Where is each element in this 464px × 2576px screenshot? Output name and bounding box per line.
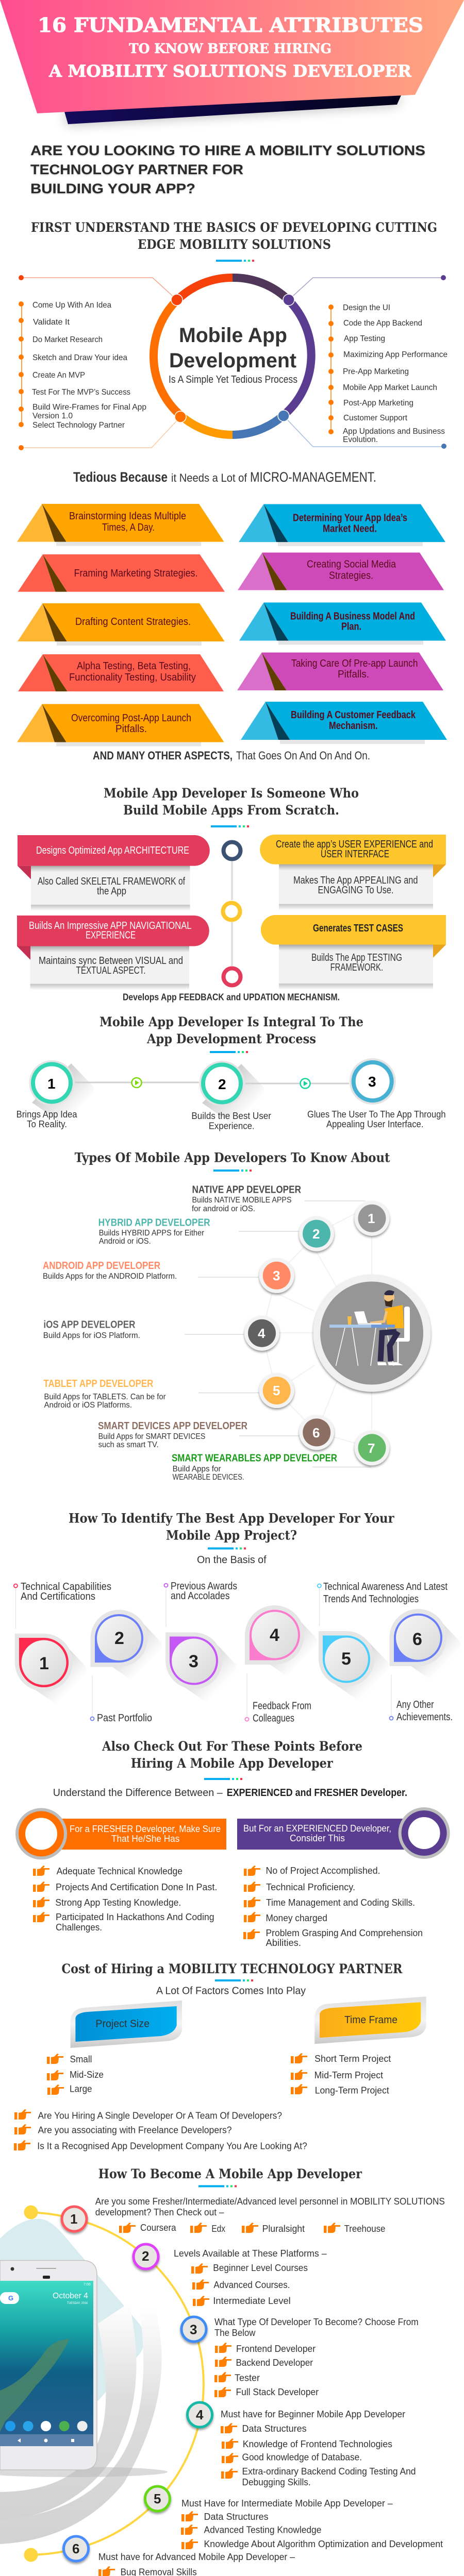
pin 6: [389, 1609, 446, 1666]
list: other factors: Is It a Recognised App Development Company You Are Looking At?: [37, 2141, 307, 2151]
step 1 text: Are you some Fresher/Intermediate/Advanced level personnel in MOBILITY SOLUTIONS: [95, 2196, 445, 2207]
banner: experienced: [237, 1807, 450, 1859]
list: experienced requirements: No of Project Accomplished.: [266, 1866, 380, 1876]
label: hybrid: Android or iOS.: [99, 1237, 151, 1246]
step 1: 1: [47, 1076, 56, 1092]
card: testing: Alpha Testing, Beta Testing,: [77, 660, 191, 672]
card: business model: Building A Business Model And: [290, 611, 415, 622]
pin labels: Any Other: [396, 1699, 434, 1710]
list: fresher requirements: Challenges.: [56, 1922, 102, 1933]
card: marketing strategies: [18, 554, 225, 592]
step 1 text: Edx: [211, 2224, 225, 2234]
banner: experienced: But For an EXPERIENCED Developer,: [243, 1823, 391, 1834]
button: project size: [71, 2001, 182, 2048]
card: social media: Creating Social Media: [307, 558, 396, 570]
label: tablet: TABLET APP DEVELOPER: [43, 1378, 154, 1389]
path node 3: [181, 2317, 206, 2342]
illustration: phone: G: [8, 2294, 13, 2302]
heading: become: How To Become A Mobile App Developer: [98, 2166, 362, 2181]
panel: test cases: FRAMEWORK.: [330, 962, 383, 973]
label: smart devices: such as smart TV.: [98, 1440, 159, 1449]
intro question: [30, 143, 425, 196]
list: other factors: [14, 2109, 307, 2151]
card: pre-launch pitfalls: Taking Care Of Pre-app Launch: [291, 658, 418, 669]
step labels: [16, 1109, 446, 1131]
button: time frame: [314, 1996, 426, 2044]
heading: check points: Hiring A Mobile App Developer: [131, 1756, 333, 1771]
list: build steps: App Updations and Business: [343, 427, 445, 436]
label: hybrid: Builds HYBRID APPS for Either: [99, 1229, 205, 1238]
intro question: TECHNOLOGY PARTNER FOR: [30, 162, 243, 177]
diagram: developer types: [43, 1184, 431, 1482]
criteria pins: [14, 1581, 460, 1724]
step 3 text: Tester: [235, 2373, 260, 2383]
step 2 text: Advanced Courses.: [213, 2280, 290, 2290]
card: market need: Determining Your App Idea’s: [293, 512, 407, 523]
step 3 text: [214, 2317, 419, 2397]
step 5 text: Data Structures: [204, 2512, 269, 2522]
node 6: 6: [312, 1425, 320, 1440]
path node 5: 5: [154, 2491, 161, 2506]
panel: navigation: Maintains sync Between VISUAL and: [39, 955, 183, 967]
list: fresher requirements: Projects And Certification Done In Past.: [56, 1882, 217, 1892]
list: build steps: Post-App Marketing: [343, 399, 413, 408]
card: testing: Functionality Testing, Usability: [69, 672, 196, 683]
pin labels: Achievements.: [396, 1711, 453, 1723]
button: project size: Project Size: [95, 2019, 150, 2030]
step 4 text: [221, 2409, 416, 2487]
path node 3: 3: [190, 2322, 197, 2337]
step labels: Builds the Best User: [191, 1111, 271, 1121]
ring title: [169, 324, 297, 385]
path node 1: 1: [70, 2211, 77, 2227]
illustration: phone: October 4: [53, 2292, 88, 2300]
path node 1: [62, 2207, 87, 2231]
process chain: [16, 1058, 446, 1131]
pin 4: [245, 1605, 304, 1665]
heading: types: [75, 1150, 390, 1172]
panel: user experience: ENGAGING To Use.: [318, 885, 394, 896]
list: experienced requirements: Technical Proficiency.: [266, 1882, 355, 1892]
list: build steps: [328, 303, 448, 444]
pin labels: Technical Capabilities: [21, 1581, 111, 1592]
pin labels: Colleagues: [253, 1713, 294, 1724]
ring title: Development: [169, 349, 296, 372]
timeline: [223, 842, 240, 985]
step 2: 2: [218, 1076, 226, 1092]
panel: architecture: Also Called SKELETAL FRAMEWORK of: [38, 876, 185, 887]
panel: test cases: Builds The App TESTING: [311, 952, 402, 963]
heading: basics: EDGE MOBILITY SOLUTIONS: [138, 237, 331, 252]
list: fresher requirements: Participated In Hackathons And Coding: [56, 1912, 214, 1922]
chart: app development ring: [19, 275, 446, 450]
step 2 text: [174, 2248, 327, 2306]
list: fresher requirements: Adequate Technical Knowledge: [57, 1866, 183, 1876]
label: smart devices: SMART DEVICES APP DEVELOPER: [98, 1420, 247, 1432]
heading: types: Types Of Mobile App Developers To Know About: [75, 1150, 390, 1165]
node 4: 4: [258, 1326, 266, 1341]
banner ribbon: [0, 0, 464, 113]
step 4 text: Data Structures: [242, 2424, 307, 2434]
list: build steps: Maximizing App Performance: [343, 350, 448, 359]
label: tablet: Android or iOS Platforms.: [44, 1401, 132, 1410]
label: ios: Build Apps for iOS Platform.: [43, 1331, 140, 1340]
card: brainstorming: Brainstorming Ideas Multiple: [69, 511, 186, 522]
list: experienced requirements: Money charged: [266, 1913, 327, 1923]
node 5: 5: [273, 1383, 280, 1398]
pin labels: Feedback From: [253, 1700, 311, 1711]
banner: experienced: Consider This: [290, 1833, 345, 1843]
list: time frames: Short Term Project: [314, 2054, 391, 2064]
step 5 text: [181, 2498, 443, 2549]
pin labels: And Certifications: [21, 1591, 95, 1602]
panel: user experience: [260, 835, 446, 910]
node 4: [244, 1316, 279, 1351]
heading: identify: [69, 1511, 394, 1566]
list: project sizes: [47, 2054, 104, 2095]
panel: test cases: [261, 915, 446, 990]
heading: check points: EXPERIENCED and FRESHER Developer.: [227, 1787, 407, 1799]
label: native: Builds NATIVE MOBILE APPS: [192, 1196, 292, 1205]
list: build steps: App Testing: [344, 334, 385, 343]
heading: integral: App Development Process: [146, 1031, 316, 1046]
heading: integral: Mobile App Developer Is Integral To The: [100, 1014, 363, 1029]
chart: learning path: [24, 2205, 212, 2562]
path node 6: 6: [72, 2541, 79, 2556]
card: feedback mechanism: Mechanism.: [329, 720, 377, 732]
heading: developer definition: [104, 786, 359, 827]
step 4 text: Good knowledge of Database.: [242, 2452, 362, 2463]
step 4 text: Extra-ordinary Backend Coding Testing And: [242, 2466, 416, 2477]
node 7: [355, 1430, 390, 1465]
step 4 text: Must have for Beginner Mobile App Developer: [221, 2409, 405, 2419]
panel: architecture: [18, 835, 210, 911]
label: android: [43, 1260, 177, 1281]
step 5 text: Advanced Testing Knowledge: [204, 2524, 321, 2535]
card: content strategies: [18, 603, 225, 646]
panel: navigation: [17, 916, 209, 990]
heading: cost: A Lot Of Factors Comes Into Play: [156, 1986, 306, 1997]
card: business model: Plan.: [341, 621, 361, 633]
heading: check points: Also Check Out For These Points Before: [102, 1739, 362, 1754]
list: idea steps: [19, 301, 146, 430]
node 2: 2: [312, 1226, 320, 1242]
list: experienced requirements: Abilities.: [266, 1938, 301, 1948]
banner: fresher: That He/She Has: [111, 1834, 179, 1844]
node 6: [299, 1415, 334, 1450]
pin 3: 3: [189, 1652, 198, 1671]
card: pre-launch pitfalls: Pitfalls.: [338, 669, 369, 680]
list: build steps: Evolution.: [343, 435, 378, 444]
path node 2: [134, 2244, 158, 2269]
step 6 text: [97, 2552, 312, 2576]
illustration: developer at desk: [313, 1275, 431, 1392]
list: idea steps: Select Technology Partner: [32, 421, 125, 430]
list: experienced requirements: Problem Grasping And Comprehension: [266, 1928, 423, 1938]
list: build steps: Design the UI: [343, 303, 390, 312]
pin labels: Previous Awards: [171, 1581, 237, 1592]
list: idea steps: Test For The MVP’s Success: [32, 388, 130, 397]
text: feedback mechanism: Develops App FEEDBACK and UPDATION MECHANISM.: [123, 992, 340, 1003]
panel: architecture: the App: [97, 886, 126, 897]
step 2 text: Beginner Level Courses: [213, 2263, 308, 2273]
card: brainstorming: Times, A Day.: [102, 522, 155, 533]
label: wearables: Build Apps for: [173, 1465, 221, 1473]
text: many other aspects: That Goes On And On And On.: [236, 749, 370, 762]
pin 3: [165, 1632, 222, 1689]
label: tablet: [43, 1378, 166, 1410]
pin labels: Past Portfolio: [97, 1713, 152, 1724]
card: brainstorming: [17, 504, 224, 546]
label: smart devices: Build Apps for SMART DEVICES: [98, 1432, 205, 1441]
pin 1: 1: [39, 1654, 49, 1673]
ring title: Is A Simple Yet Tedious Process: [169, 374, 297, 385]
node 3: 3: [273, 1268, 280, 1283]
label: wearables: SMART WEARABLES APP DEVELOPER: [172, 1452, 337, 1464]
label: native: [192, 1184, 301, 1213]
panel: architecture: Designs Optimized App ARCHITECTURE: [36, 845, 189, 856]
heading: check points: Understand the Difference Between –: [53, 1787, 223, 1799]
pin labels: [21, 1581, 453, 1724]
card: social media: [238, 552, 444, 590]
pin labels: Trends And Technologies: [323, 1594, 419, 1605]
button: time frame: Time Frame: [344, 2014, 397, 2026]
list: idea steps: Come Up With An Idea: [32, 301, 111, 310]
heading: identify: On the Basis of: [197, 1554, 267, 1566]
label: ios: [43, 1319, 140, 1340]
pin 6: 6: [412, 1630, 422, 1649]
heading: basics: [31, 220, 437, 262]
label: ios: iOS APP DEVELOPER: [43, 1319, 136, 1330]
path node 4: 4: [196, 2407, 204, 2422]
card: marketing strategies: Framing Marketing Strategies.: [74, 568, 198, 579]
list: build steps: Pre-App Marketing: [343, 367, 409, 376]
card: post-launch pitfalls: [17, 704, 224, 746]
pin 5: 5: [341, 1649, 351, 1669]
intro question: ARE YOU LOOKING TO HIRE A MOBILITY SOLUTIONS: [30, 143, 425, 158]
node 7: 7: [368, 1440, 375, 1456]
ring title: Mobile App: [179, 324, 287, 347]
heading: micro-management: Tedious Because: [73, 469, 168, 485]
list: fresher requirements: [33, 1866, 217, 1933]
pin 2: 2: [114, 1629, 124, 1648]
text: many other aspects: [93, 749, 370, 762]
list: idea steps: Version 1.0: [32, 412, 73, 420]
card: testing: [18, 654, 224, 691]
heading: identify: Mobile App Project?: [166, 1528, 297, 1543]
card: social media: Strategies.: [329, 570, 373, 581]
title text: [38, 13, 423, 81]
panel: navigation: TEXTUAL ASPECT.: [76, 965, 145, 976]
pin 2: [91, 1609, 147, 1667]
label: hybrid: [98, 1217, 210, 1246]
step 1 text: [95, 2196, 445, 2234]
step 4 text: Knowledge of Frontend Technologies: [243, 2439, 392, 2449]
node 1: 1: [368, 1211, 375, 1226]
banner: fresher: [15, 1808, 226, 1859]
card: post-launch pitfalls: Overcoming Post-App Launch: [71, 713, 191, 724]
step 3 text: The Below: [214, 2328, 256, 2338]
card: business model: [239, 603, 446, 645]
panel: user experience: Makes The App APPEALING and: [293, 875, 418, 886]
panel: test cases: Generates TEST CASES: [313, 923, 403, 934]
step 3 text: What Type Of Developer To Become? Choose From: [214, 2317, 419, 2327]
step 4 text: Debugging Skills.: [242, 2477, 311, 2487]
list: idea steps: Create An MVP: [32, 371, 85, 380]
pin 4: 4: [270, 1625, 279, 1645]
heading: micro-management: [73, 469, 376, 485]
panel: navigation: Builds An Impressive APP NAVIGATIONAL: [29, 920, 192, 931]
step 2: [199, 1061, 244, 1106]
title text: 16 FUNDAMENTAL ATTRIBUTES: [38, 13, 423, 37]
heading: developer definition: Mobile App Developer Is Someone Who: [104, 786, 359, 801]
node 1: [355, 1201, 390, 1236]
banner: fresher: For a FRESHER Developer, Make Sure: [70, 1824, 221, 1834]
list: project sizes: Large: [70, 2084, 92, 2094]
label: android: ANDROID APP DEVELOPER: [43, 1260, 160, 1272]
title banner: [0, 0, 464, 124]
intro question: BUILDING YOUR APP?: [30, 181, 195, 196]
heading: become: [98, 2166, 362, 2187]
list: time frames: [291, 2053, 391, 2096]
step 1: [29, 1060, 74, 1106]
path node 4: [188, 2402, 212, 2427]
heading: cost: [61, 1961, 403, 1997]
step 1 text: Treehouse: [344, 2224, 385, 2234]
list: fresher requirements: Strong App Testing Knowledge.: [55, 1897, 181, 1908]
list: other factors: Are you associating with Freelance Developers?: [38, 2125, 232, 2135]
heading: integral: [100, 1014, 363, 1053]
heading: micro-management: it Needs a Lot of: [171, 471, 247, 484]
step labels: Appealing User Interface.: [326, 1119, 424, 1129]
step labels: Glues The User To The App Through: [307, 1109, 445, 1120]
title text: TO KNOW BEFORE HIRING: [129, 41, 332, 57]
pin 5: [319, 1631, 374, 1687]
heading: check points: [53, 1739, 407, 1799]
step 3 text: Backend Developer: [236, 2358, 313, 2368]
list: project sizes: Mid-Size: [70, 2070, 104, 2080]
label: tablet: Build Apps for TABLETS. Can be for: [44, 1393, 166, 1401]
card: feedback mechanism: [241, 702, 447, 744]
list: build steps: Customer Support: [343, 414, 408, 422]
panel: user experience: USER INTERFACE: [321, 849, 389, 860]
heading: identify: How To Identify The Best App Developer For Your: [69, 1511, 394, 1526]
step labels: Experience.: [209, 1121, 255, 1131]
card: market need: [239, 504, 445, 546]
step labels: To Reality.: [27, 1119, 67, 1129]
step 3: [350, 1058, 396, 1105]
title text: A MOBILITY SOLUTIONS DEVELOPER: [48, 61, 411, 81]
card: pre-launch pitfalls: [237, 652, 443, 690]
list: idea steps: Do Market Research: [32, 335, 103, 344]
label: smart devices: [98, 1420, 247, 1449]
label: native: for android or iOS.: [192, 1205, 255, 1213]
card: content strategies: Drafting Content Strategies.: [75, 616, 191, 628]
step 3 text: Frontend Developer: [236, 2344, 316, 2354]
banner back fold: [64, 95, 401, 124]
card: feedback mechanism: Building A Customer Feedback: [291, 709, 416, 721]
illustration: phone: TUESDAY, 2016: [67, 2302, 88, 2305]
step 2 text: Levels Available at These Platforms –: [174, 2248, 327, 2259]
path node 2: 2: [142, 2248, 149, 2264]
label: android: Builds Apps for the ANDROID Platform.: [43, 1272, 177, 1281]
list: idea steps: Build Wire-Frames for Final App: [32, 403, 146, 412]
card: post-launch pitfalls: Pitfalls.: [115, 723, 147, 735]
list: build steps: Mobile App Market Launch: [343, 383, 437, 392]
step 5 text: Must Have for Intermediate Mobile App Developer –: [181, 2498, 393, 2509]
step 1 text: Coursera: [140, 2223, 176, 2233]
node 2: [299, 1216, 334, 1251]
label: wearables: WEARABLE DEVICES.: [173, 1473, 244, 1482]
illustration: phone: 7:00: [84, 2283, 91, 2286]
list: time frames: Mid-Term Project: [314, 2070, 383, 2080]
list: idea steps: Sketch and Draw Your idea: [32, 353, 127, 362]
list: idea steps: Validate It: [33, 318, 70, 327]
heading: micro-management: MICRO-MANAGEMENT.: [250, 469, 376, 485]
label: hybrid: HYBRID APP DEVELOPER: [98, 1217, 210, 1229]
label: native: NATIVE APP DEVELOPER: [192, 1184, 301, 1195]
list: experienced requirements: [243, 1866, 423, 1948]
panel: navigation: EXPERIENCE: [86, 930, 136, 941]
path node 6: [64, 2536, 89, 2561]
list: time frames: Long-Term Project: [315, 2086, 389, 2096]
node 5: [259, 1373, 294, 1408]
heading: developer definition: Build Mobile Apps From Scratch.: [123, 803, 339, 818]
label: wearables: [172, 1452, 337, 1482]
step 5 text: Knowledge About Algorithm Optimization and Development: [204, 2539, 443, 2549]
step 3: 3: [368, 1074, 376, 1090]
path node 5: [145, 2486, 170, 2511]
step 1 text: development? Then Check out –: [95, 2207, 224, 2217]
list: other factors: Are You Hiring A Single Developer Or A Team Of Developers?: [38, 2110, 282, 2121]
step 1 text: Pluralsight: [262, 2224, 305, 2234]
step 2 text: Intermediate Level: [213, 2296, 291, 2306]
step 6 text: Must have for Advanced Mobile App Developer –: [98, 2552, 295, 2562]
heading: cost: Cost of Hiring a MOBILITY TECHNOLOGY PARTNER: [61, 1961, 403, 1976]
list: build steps: Code the App Backend: [343, 319, 422, 328]
illustration: phone: [0, 2261, 97, 2470]
list: project sizes: Small: [70, 2054, 92, 2064]
text: many other aspects: AND MANY OTHER ASPECTS,: [93, 749, 233, 762]
pin 1: [15, 1634, 73, 1691]
node 3: [259, 1258, 294, 1293]
card: market need: Market Need.: [323, 523, 377, 535]
step 3 text: Full Stack Developer: [236, 2387, 319, 2397]
pin labels: and Accolades: [171, 1590, 230, 1602]
step labels: Brings App Idea: [16, 1109, 78, 1120]
list: experienced requirements: Time Management and Coding Skills.: [266, 1897, 415, 1908]
illustration: phone backdrop: [0, 2219, 168, 2544]
